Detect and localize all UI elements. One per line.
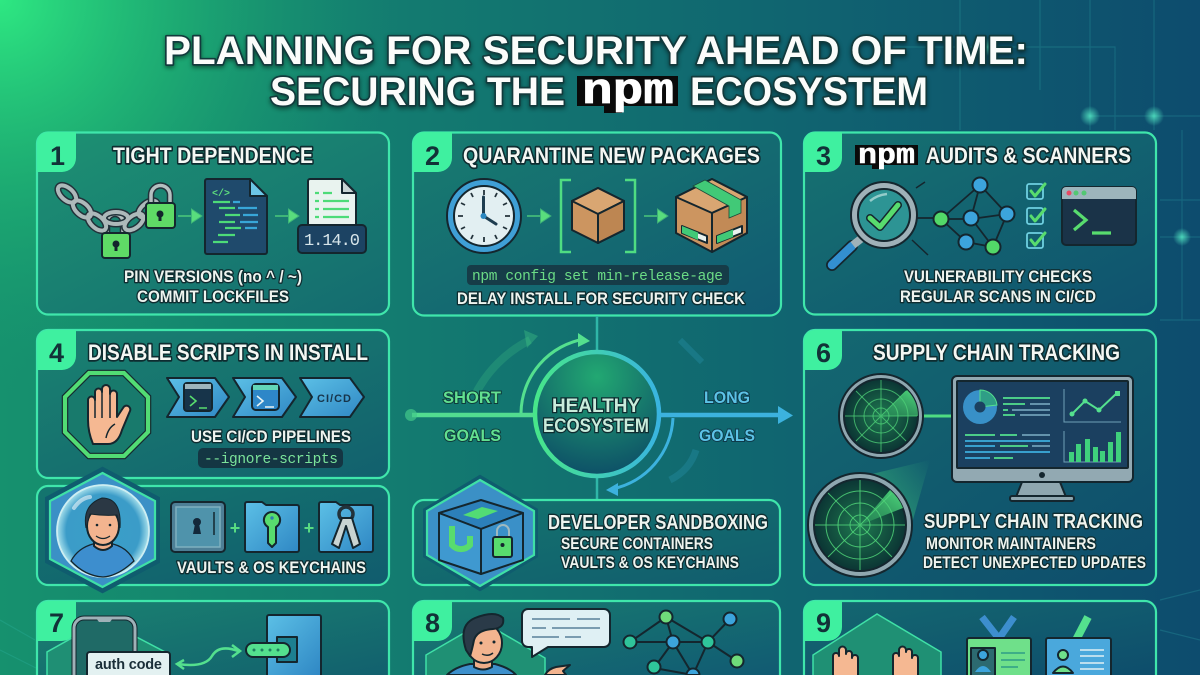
connectors [405, 316, 793, 501]
icon: developer [447, 614, 570, 675]
icon: lockfile with version: 1.14.0 [304, 232, 360, 251]
caption: MONITOR MAINTAINERS [926, 534, 1096, 553]
heading: AUDITS & SCANNERS [926, 143, 1131, 168]
panel 7: authentication [37, 601, 389, 675]
caption: PIN VERSIONS (no ^ / ~) [124, 267, 302, 286]
number tab 6 [804, 330, 842, 370]
icon: speech bubble [522, 609, 610, 657]
caption [923, 534, 1146, 572]
number tab 6: 6 [816, 338, 831, 368]
long goals labels [699, 388, 755, 445]
caption: VAULTS & OS KEYCHAINS [177, 558, 366, 577]
number tab 4: 4 [49, 338, 64, 368]
panel 4: disable scripts in install [37, 330, 389, 478]
panel 1: tight dependence [37, 132, 389, 314]
auth code label [87, 652, 170, 675]
icon: radar large [808, 460, 930, 577]
icon: door with key [246, 615, 321, 675]
pipeline chevrons: CI/CD [317, 393, 351, 405]
bar chart [1069, 432, 1121, 462]
title [164, 29, 1028, 117]
short goals labels [443, 388, 502, 445]
icon: key folder [245, 502, 299, 552]
caption: USE CI/CD PIPELINES [191, 427, 351, 446]
icon: network [624, 610, 744, 675]
icon: taped package [676, 179, 747, 252]
short goals labels: SHORT [443, 388, 502, 407]
pipeline chevrons [167, 378, 364, 417]
icon: check boxes [1027, 184, 1045, 248]
number tab 3: 3 [816, 141, 831, 171]
center: healthy ecosystem [405, 316, 793, 501]
hexagon with sandbox cube [425, 477, 536, 589]
caption: SECURE CONTAINERS [561, 534, 713, 553]
number tab 8: 8 [425, 608, 440, 638]
number tab 9: 9 [816, 608, 831, 638]
hexagon with developer in bubble [48, 470, 157, 590]
heading: DISABLE SCRIPTS IN INSTALL [88, 340, 368, 365]
icon: dashboard monitor [952, 376, 1133, 501]
caption: COMMIT LOCKFILES [137, 287, 289, 306]
arrow [275, 210, 298, 222]
title: PLANNING FOR SECURITY AHEAD OF TIME: [164, 29, 1028, 73]
caption: DELAY INSTALL FOR SECURITY CHECK [457, 289, 746, 308]
icon: quarantined cube [561, 180, 635, 252]
icon: stop hand [65, 373, 148, 456]
arrow [178, 210, 201, 222]
long goals labels: LONG [704, 388, 750, 407]
terminal icon [252, 384, 279, 410]
title: ECOSYSTEM [690, 70, 928, 114]
arrow [527, 210, 550, 222]
number tab 8 [413, 601, 452, 641]
long goals labels: GOALS [699, 426, 755, 445]
icon: clock [447, 179, 521, 253]
caption [561, 534, 739, 572]
icon: code file [205, 179, 267, 254]
number tab 1 [37, 132, 76, 172]
hexagon [47, 620, 167, 675]
npm logo: npm [858, 139, 915, 172]
hexagon [813, 614, 941, 675]
number tab 2: 2 [425, 141, 440, 171]
caption: VULNERABILITY CHECKS [904, 267, 1092, 286]
icon: hands [833, 646, 918, 675]
heading: SUPPLY CHAIN TRACKING [873, 340, 1120, 365]
caption: VAULTS & OS KEYCHAINS [561, 553, 739, 572]
caption: REGULAR SCANS IN CI/CD [900, 287, 1096, 306]
panel 6: supply chain tracking [804, 330, 1156, 585]
arrow: exchange [177, 645, 240, 669]
icon: blue id badge [1046, 617, 1111, 675]
panel 3: npm audits and scanners [804, 132, 1156, 314]
number tab 4 [37, 330, 76, 370]
auth code label: auth code [95, 657, 162, 673]
panel 2: quarantine new packages [413, 132, 781, 316]
icon: terminal [1062, 187, 1136, 245]
number tab 3 [804, 132, 842, 172]
number tab 9 [804, 601, 842, 641]
sub heading: SUPPLY CHAIN TRACKING [924, 511, 1143, 533]
line chart [1064, 389, 1121, 462]
caption [900, 267, 1096, 306]
cycle arrows [475, 330, 702, 496]
icon: magnet [452, 526, 470, 549]
heading: TIGHT DEPENDENCE [113, 143, 313, 168]
icon: chain with padlocks [55, 182, 175, 258]
heading: QUARANTINE NEW PACKAGES [463, 143, 760, 168]
panel: developer sandboxing [413, 477, 780, 589]
short goals labels: GOALS [444, 426, 501, 445]
icon: phone [74, 618, 135, 675]
link line [923, 414, 953, 418]
core circle: HEALTHY [552, 396, 640, 417]
number tab 1: 1 [50, 141, 65, 171]
title: SECURING THE [270, 70, 565, 114]
icon: radar small [839, 374, 923, 458]
icon: code file: </> [212, 188, 230, 200]
core circle [535, 352, 659, 476]
icon: padlock [493, 525, 512, 557]
icon: magnifier [832, 182, 928, 265]
heading: DEVELOPER SANDBOXING [548, 512, 768, 534]
number tab 7 [37, 601, 76, 641]
number tab 2 [413, 132, 452, 172]
panel 5: vaults and keychains [37, 470, 389, 590]
arrow [644, 210, 667, 222]
plus: + [230, 518, 240, 538]
command pill: --ignore-scripts [204, 452, 338, 468]
caption [124, 267, 302, 306]
terminal icon [184, 383, 212, 411]
icon: network [917, 178, 1014, 254]
title: npm [582, 67, 674, 117]
command pill: npm config set min-release-age [472, 269, 723, 285]
plus: + [304, 518, 314, 538]
icon: safe [171, 502, 225, 552]
icon: green id badge [967, 617, 1031, 675]
core circle: ECOSYSTEM [543, 416, 649, 437]
hexagon [426, 622, 545, 675]
panel 8: community [413, 601, 780, 675]
caption: DETECT UNEXPECTED UPDATES [923, 553, 1146, 572]
icon: lockfile with version [298, 179, 366, 253]
pie chart [963, 390, 997, 424]
number tab 7: 7 [49, 608, 64, 638]
icon: keys folder [319, 502, 373, 552]
panel 9: identity [804, 601, 1156, 675]
